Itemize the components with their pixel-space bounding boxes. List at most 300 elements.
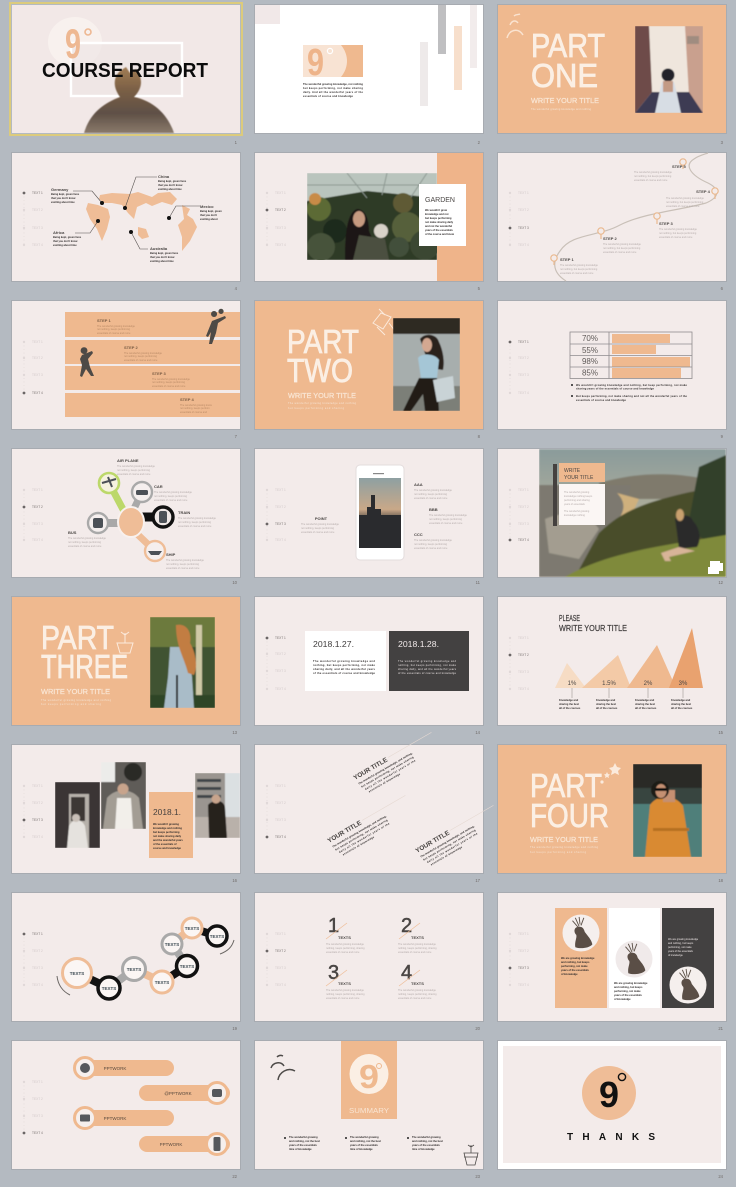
side navigation: TEXT 1 — [518, 340, 529, 344]
ship label: SHIP — [166, 552, 176, 557]
circle node 8 — [207, 926, 227, 946]
page number: 21 — [718, 1026, 724, 1031]
label Germany: Germany — [51, 187, 69, 192]
title card — [553, 463, 605, 526]
BBB label — [429, 507, 468, 525]
thanks wordmark: THANKS — [567, 1132, 655, 1143]
column text 1 — [559, 698, 581, 710]
text card — [419, 184, 466, 246]
column white: of knowledge — [614, 997, 631, 1001]
caption: but keeps performing and sharing — [288, 407, 345, 410]
side navigation — [266, 636, 286, 691]
page number: 18 — [718, 878, 724, 883]
logo 9 degree: 9 — [65, 20, 81, 67]
BBB label: essentials of course and more — [429, 522, 463, 525]
pill 4: PPTWORK — [160, 1142, 182, 1147]
icon: camera — [708, 561, 723, 574]
point 1: 1 — [328, 915, 339, 937]
chain links — [77, 928, 217, 988]
side navigation: TEXT 2 — [32, 208, 43, 212]
step 4: STEP 4 — [696, 189, 711, 194]
circle node 1 — [62, 958, 92, 988]
subtitle: WRITE YOUR TITLE — [530, 835, 598, 844]
step 3 text: The wonderful growing knowledge — [152, 378, 191, 381]
title card: years of essentials — [564, 503, 585, 506]
side navigation: TEXT 2 — [275, 949, 286, 953]
side navigation: TEXT 4 — [518, 538, 529, 542]
peach date card: but keeps performing — [153, 830, 180, 834]
side navigation: TEXT 4 — [32, 1131, 43, 1135]
side navigation: TEXT 3 — [518, 373, 529, 377]
timeline curve — [555, 153, 717, 281]
point 4 — [398, 962, 437, 1000]
card: 2018.1.27: sharing daily, and all the wonderful years — [313, 667, 376, 671]
step 1 text: The wonderful growing knowledge — [97, 325, 136, 328]
bullet list: essentials of course and knowledge — [576, 398, 627, 402]
point 3: TEXTS — [338, 981, 351, 986]
side navigation: TEXT 3 — [518, 226, 529, 230]
page number: 7 — [235, 434, 238, 439]
page number: 8 — [478, 434, 481, 439]
peach date card: course and knowledge — [153, 846, 182, 850]
train label: essentials of course and more — [178, 525, 212, 528]
point 1 — [326, 915, 365, 954]
slide 19: chain of circles — [11, 892, 241, 1031]
side navigation — [23, 488, 43, 542]
side navigation: TEXT 2 — [275, 505, 286, 509]
column text 2: all of the courses — [596, 706, 618, 710]
circle node 2 — [98, 977, 120, 999]
triangle chart — [555, 628, 703, 698]
slide 5: garden — [254, 152, 484, 291]
side navigation: TEXT 4 — [275, 538, 286, 542]
slide 11: phone mockup — [254, 448, 484, 585]
side navigation — [509, 488, 529, 542]
heading ONE: ONE — [531, 57, 598, 94]
caption: The wonderful growing knowledge and nothing — [531, 108, 592, 111]
point 2: TEXTS — [411, 935, 424, 940]
side navigation: TEXT 1 — [275, 636, 286, 640]
point label: The wonderful growing knowledge — [301, 523, 340, 526]
column peach: years of the essentials — [561, 968, 589, 972]
step 3 — [659, 221, 698, 239]
BBB label: BBB — [429, 507, 438, 512]
side navigation — [509, 340, 529, 395]
bullet column 3: The wonderful growing — [412, 1135, 441, 1139]
title card: The wonderful growing — [564, 510, 590, 513]
side navigation: TEXT 3 — [32, 522, 43, 526]
step 2 — [603, 236, 642, 254]
side navigation: TEXT 1 — [518, 488, 529, 492]
column text 1: all of the courses — [559, 706, 581, 710]
step 4: essentials of course and more — [666, 205, 700, 208]
pill 4 — [139, 1134, 230, 1154]
car label — [154, 484, 193, 502]
label Mexico: Being kept, green — [200, 209, 222, 213]
connector arms — [98, 483, 163, 551]
side navigation — [509, 636, 529, 691]
ship label: not nothing, keeps performing — [166, 563, 200, 566]
bullet column 1: years of the essentials — [289, 1143, 317, 1147]
air plane label: AIR PLANE — [117, 458, 139, 463]
caption — [530, 846, 599, 854]
step 4 text: essentials of course and — [180, 411, 208, 414]
point 1: TEXTS — [338, 935, 351, 940]
page number: 24 — [718, 1174, 724, 1179]
heading — [559, 614, 627, 633]
subtitle: WRITE YOUR TITLE — [41, 687, 110, 696]
column dark — [662, 908, 714, 1008]
ship label: essentials of course and more — [166, 567, 200, 570]
CCC label: CCC — [414, 532, 423, 537]
column text 3: Knowledge and — [635, 698, 655, 702]
column white: We are growing knowledge — [614, 981, 648, 985]
column white: and nothing, but keeps — [614, 985, 643, 989]
bar chart table: 70% — [582, 334, 598, 343]
step 4 text: not nothing, keeps perform — [180, 407, 210, 410]
side navigation: TEXT 1 — [32, 488, 43, 492]
side navigation: TEXT 2 — [32, 1097, 43, 1101]
side navigation: TEXT 2 — [32, 949, 43, 953]
side navigation: TEXT 1 — [32, 932, 43, 936]
train label: The wonderful growing knowledge — [178, 517, 217, 520]
side navigation — [23, 340, 43, 395]
title card: knowledge nothing keeps — [564, 495, 593, 498]
diagonal title block 2: but keeps performing, not make sharing — [334, 818, 389, 852]
circle node 5: TEXTS — [180, 964, 194, 969]
point 2 — [398, 915, 437, 954]
step 2: not nothing, but keeps performing — [603, 247, 641, 250]
column dark: and nothing, but keeps — [668, 942, 694, 945]
step 3 text — [152, 371, 191, 388]
side navigation: TEXT 4 — [32, 538, 43, 542]
page number: 11 — [476, 580, 481, 585]
AAA label: not nothing, keeps performing — [414, 493, 448, 496]
diagonal title block 3: but keeps performing, not make sharing — [422, 828, 477, 862]
BBB label: not nothing, keeps performing — [429, 518, 463, 521]
slide 14: two dated cards — [254, 596, 484, 735]
bullet column 1: time of knowledge — [289, 1147, 312, 1151]
card: 2018.1.28 — [389, 631, 469, 691]
page number: 20 — [475, 1026, 481, 1031]
step 1 text: not nothing, keeps performing — [97, 328, 131, 331]
step 2 text: STEP 2 — [124, 345, 138, 350]
diagonal title block 1: YOUR TITLE — [352, 756, 389, 782]
peach date card: of the essentials of — [153, 842, 177, 846]
step 4 text — [180, 397, 212, 414]
circle node 7: TEXTS — [185, 926, 199, 931]
circle node 2: TEXTS — [102, 986, 116, 991]
step 1: STEP 1 — [560, 257, 574, 262]
step 3 text: not nothing, keeps performing — [152, 381, 186, 384]
text card: but keeps performing — [425, 216, 452, 220]
triangle chart: 1.5% — [602, 681, 616, 687]
point label: essentials of course and more — [301, 531, 335, 534]
side navigation: TEXT 1 — [518, 191, 529, 195]
AAA label: The wonderful growing knowledge — [414, 489, 453, 492]
icon: birds — [271, 1055, 295, 1080]
column text 4: sharing the best — [671, 702, 691, 706]
card: 2018.1.27: 2018.1.27. — [313, 639, 354, 649]
point 1: essentials of course and more — [326, 951, 360, 954]
photo: woman drinking — [101, 762, 146, 829]
diagonal title block 3: daily all the wonderful years of the — [426, 831, 479, 864]
car node — [132, 482, 152, 502]
slide 6: step timeline — [497, 152, 727, 291]
caption — [41, 699, 112, 706]
step 2 text: essentials of course and more — [124, 359, 158, 362]
bus label: not nothing, keeps performing — [68, 541, 102, 544]
bar chart table — [570, 332, 692, 378]
bullet column 3: years of the essentials — [412, 1143, 440, 1147]
bar chart table: 55% — [582, 346, 598, 355]
text card: knowledge and not — [425, 212, 449, 216]
side navigation: TEXT 3 — [32, 373, 43, 377]
side navigation — [23, 191, 43, 247]
heading PART: PART — [41, 619, 114, 656]
train label — [178, 510, 217, 528]
triangle chart: 2% — [644, 681, 653, 687]
air plane node — [99, 473, 119, 493]
vertical bar pale — [470, 5, 477, 68]
step 1: not nothing, but keeps performing — [560, 268, 598, 271]
slide 2: logo on white — [254, 4, 484, 145]
step 4 text: STEP 4 — [180, 397, 194, 402]
heading TWO: TWO — [287, 352, 353, 389]
bullet column 3 — [407, 1135, 443, 1151]
diagonal title block 1: but keeps performing, not make sharing — [360, 755, 415, 789]
step 5: essentials of course and more — [634, 179, 668, 182]
pill 2: @PPTWORK — [164, 1091, 192, 1096]
title card: knowledge nothing — [564, 514, 585, 517]
side navigation: TEXT 1 — [32, 191, 43, 195]
side navigation: TEXT 2 — [518, 653, 529, 657]
text card: years of the essentials — [425, 228, 453, 232]
point 2: essentials of course and more — [398, 951, 432, 954]
bullet list: But keeps performing, not make sharing and not all the wonderful years of the — [576, 394, 688, 398]
bullet column 3: time of knowledge — [412, 1147, 435, 1151]
page number: 19 — [232, 1026, 238, 1031]
step 5: not nothing, but keeps performing — [634, 175, 672, 178]
caption — [288, 402, 357, 410]
slide 16: photo collage — [11, 744, 241, 883]
CCC label: essentials of course and more — [414, 547, 448, 550]
label China — [158, 174, 187, 191]
side navigation: TEXT 4 — [275, 835, 286, 839]
step 2 text — [124, 345, 163, 362]
title card: performing and sharing — [564, 499, 590, 502]
slide 9: percentage table — [497, 300, 727, 439]
point 2: The wonderful growing knowledge — [398, 943, 437, 946]
diagonal title block 3: essentials of knowledge — [430, 845, 463, 866]
point 4: nothing, keeps performing, sharing — [398, 993, 437, 996]
step 3 text: essentials of course and more — [152, 385, 186, 388]
subtitle: WRITE YOUR TITLE — [288, 391, 356, 400]
diagonal title block 2: daily all the wonderful years of the — [338, 821, 391, 854]
photo: woman with laptop — [393, 318, 460, 411]
vertical bar gray — [438, 5, 446, 54]
column peach: performing, not make — [561, 964, 588, 968]
page number: 22 — [232, 1174, 238, 1179]
pill 2 — [139, 1082, 230, 1104]
peach summary panel — [341, 1041, 397, 1119]
page number: 3 — [721, 140, 724, 145]
point 1: nothing, keeps performing, sharing — [326, 947, 365, 950]
step 3: The wonderful growing knowledge — [659, 228, 698, 231]
point 4: essentials of course and more — [398, 997, 432, 1000]
bus label: BUS — [68, 530, 77, 535]
train label: TRAIN — [178, 510, 190, 515]
diagonal title block 1 — [352, 731, 442, 796]
peach date card — [149, 792, 193, 858]
label Mexico: exciting about — [200, 217, 218, 221]
point 3: The wonderful growing knowledge — [326, 989, 365, 992]
side navigation — [266, 932, 286, 987]
caption: The wonderful growing knowledge and nothing — [41, 699, 112, 702]
bullet column 2: and nothing, not the best — [350, 1139, 381, 1143]
pill 1: PPTWORK — [104, 1066, 126, 1071]
label China: Being kept, green lives — [158, 179, 187, 183]
column dark: of knowledge — [668, 954, 683, 957]
point 4: TEXTS — [411, 981, 424, 986]
diagonal title block 1: essentials of knowledge — [368, 772, 401, 793]
diagonal title block 2: YOUR TITLE — [326, 819, 363, 845]
point 2: 2 — [401, 915, 412, 937]
side navigation: TEXT 4 — [32, 983, 43, 987]
photo: woman on hillside — [539, 449, 726, 577]
side navigation: TEXT 3 — [518, 522, 529, 526]
point 4: The wonderful growing knowledge — [398, 989, 437, 992]
AAA label — [414, 482, 453, 500]
column text 3: all of the courses — [635, 706, 657, 710]
side navigation: TEXT 2 — [518, 208, 529, 212]
side navigation: TEXT 4 — [275, 243, 286, 247]
side navigation: TEXT 4 — [518, 391, 529, 395]
hair bun photo — [84, 67, 174, 133]
label Germany: that you don't know — [51, 196, 76, 200]
side navigation: TEXT 2 — [518, 505, 529, 509]
side navigation — [509, 932, 529, 987]
bar chart table: 98% — [582, 357, 598, 366]
side navigation: TEXT 2 — [32, 505, 43, 509]
selected slide yellow frame — [10, 3, 242, 135]
circle node 7 — [182, 918, 202, 938]
phone — [356, 465, 404, 560]
icon: birds — [507, 14, 523, 38]
side navigation: TEXT 4 — [275, 687, 286, 691]
car label: CAR — [154, 484, 163, 489]
ship label: The wonderful growing knowledge — [166, 559, 205, 562]
diagonal title block 2: essentials of knowledge — [342, 835, 375, 856]
caption: but keeps performing and sharing — [41, 703, 102, 706]
label Germany — [51, 187, 80, 204]
heading: PLEASE — [559, 614, 580, 623]
side navigation: TEXT 3 — [32, 226, 43, 230]
step 5 — [634, 164, 686, 182]
bullet column 1 — [284, 1135, 320, 1151]
step 5: STEP 5 — [672, 164, 686, 169]
bullet list: sharing years of the essentials of course and knowledge — [576, 386, 655, 390]
photo: woman in garden — [150, 617, 215, 708]
slide 13: part three — [11, 596, 241, 735]
side navigation: TEXT 3 — [32, 1114, 43, 1118]
bullet column 1: and nothing, not the best — [289, 1139, 320, 1143]
label Africa: Africa — [53, 230, 65, 235]
column dark: performing, not make — [668, 946, 692, 949]
label Mexico: that you don't — [200, 213, 217, 217]
heading FOUR: FOUR — [530, 797, 609, 834]
label China: exciting about time — [158, 187, 182, 191]
page number: 15 — [718, 730, 724, 735]
step 4: The wonderful growing knowledge — [666, 197, 705, 200]
page number: 14 — [475, 730, 481, 735]
air plane label — [117, 458, 156, 476]
side navigation: TEXT 3 — [275, 669, 286, 673]
map markers — [96, 201, 171, 234]
side navigation: TEXT 2 — [32, 356, 43, 360]
side navigation: TEXT 4 — [32, 391, 43, 395]
step 5: The wonderful growing knowledge — [634, 171, 673, 174]
point 3: nothing, keeps performing, sharing — [326, 993, 365, 996]
side navigation — [509, 191, 529, 247]
column white — [609, 908, 660, 1008]
subtitle: WRITE YOUR TITLE — [531, 96, 599, 105]
side navigation: TEXT 4 — [518, 687, 529, 691]
peach bands — [65, 312, 240, 417]
label China: China — [158, 174, 170, 179]
side navigation: TEXT 3 — [275, 226, 286, 230]
column text 1: Knowledge and — [559, 698, 579, 702]
triangle chart: 1% — [568, 681, 577, 687]
logo card — [303, 42, 363, 84]
photo: woman in corridor — [635, 26, 703, 113]
label Africa: exciting about time — [53, 243, 77, 247]
side navigation: TEXT 3 — [518, 670, 529, 674]
car label: essentials of course and more — [154, 499, 188, 502]
photo: black and white doorway — [55, 782, 100, 848]
peach date card: and the wonderful years — [153, 838, 183, 842]
step 1: The wonderful growing knowledge — [560, 264, 599, 267]
side navigation: TEXT 1 — [275, 932, 286, 936]
icon: stars — [600, 763, 621, 784]
label China: that you don't know — [158, 183, 183, 187]
diagonal title block 2 — [326, 794, 416, 859]
step 2: The wonderful growing knowledge — [603, 243, 642, 246]
side navigation: TEXT 4 — [32, 243, 43, 247]
peach date card: We wouldn't growing — [153, 822, 179, 826]
vertical bar light — [420, 42, 428, 106]
point 3: 3 — [328, 962, 339, 984]
title card: WRITE — [564, 468, 581, 474]
triangle chart: 3% — [679, 681, 688, 687]
circle node 3 — [122, 958, 146, 980]
side navigation: TEXT 1 — [518, 932, 529, 936]
label Australia: that you don't know — [150, 255, 175, 259]
text card: of the course and know — [425, 232, 455, 236]
diagonal title block 3 — [414, 804, 504, 869]
diagonal title block 2: The wonderful growing knowledge, and nothing, — [331, 814, 387, 849]
column peach — [555, 908, 607, 1008]
body text: daily. And all the wonderful years of the — [303, 90, 364, 94]
card: 2018.1.27: of the essentials of course and knowledge — [313, 671, 376, 675]
bullet column 2: The wonderful growing — [350, 1135, 379, 1139]
slide 3: part one — [497, 4, 727, 145]
side navigation: TEXT 4 — [518, 243, 529, 247]
step 1 text: essentials of course and more — [97, 332, 131, 335]
logo circle — [582, 1066, 636, 1120]
body text: essentials of course and knowledge — [303, 94, 354, 98]
step 2: STEP 2 — [603, 236, 617, 241]
